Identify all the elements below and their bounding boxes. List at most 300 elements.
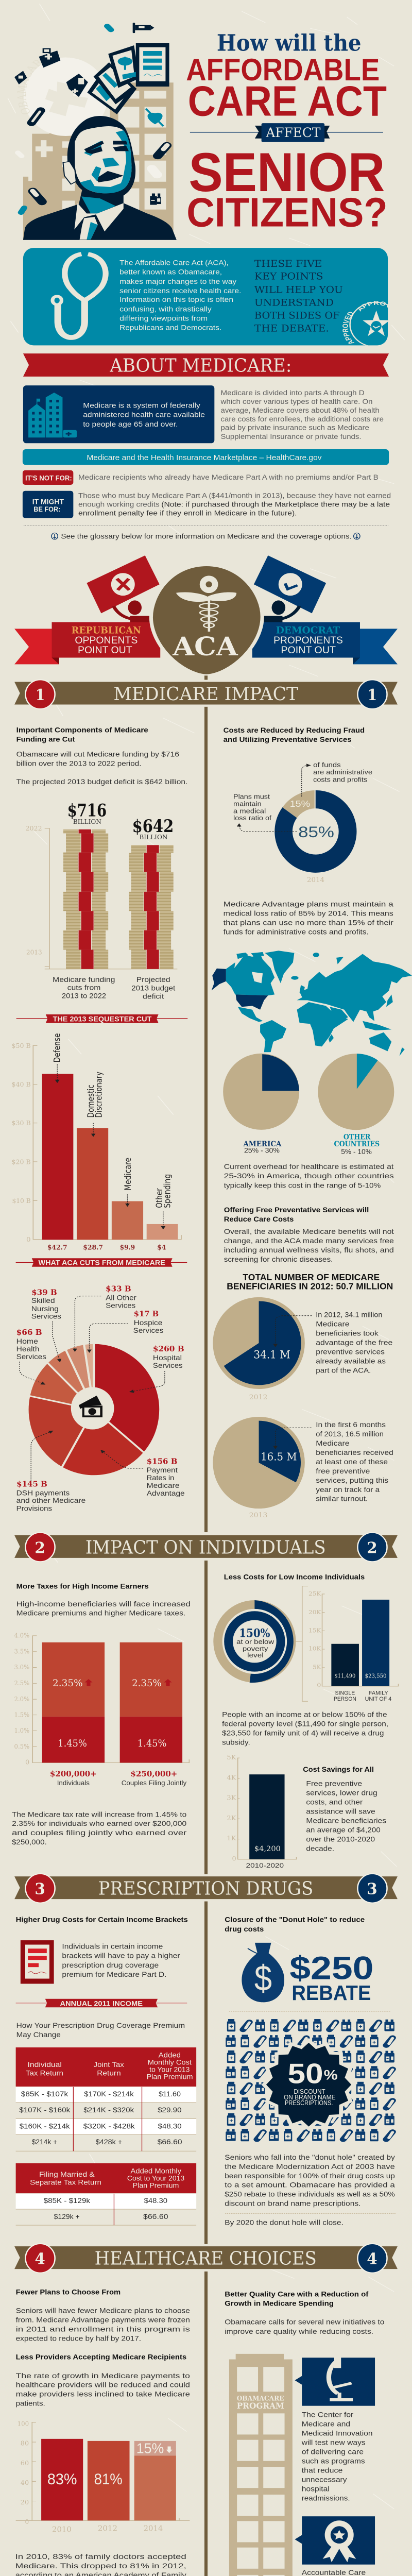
leader arrows <box>20 1296 165 1481</box>
chart: Medicare tax rate bars: 2.5% <box>14 1680 29 1687</box>
text: Medicare parts: which cover various types of health care. On <box>220 398 372 405</box>
badge: ACA caduceus <box>151 565 262 680</box>
text: cost savings for all: Free preventive <box>306 1780 362 1788</box>
key points text: UNDERSTAND <box>254 297 334 308</box>
chart: medical loss ratio donut: 2014 <box>307 875 324 884</box>
chart: poverty level bars: $11,490 <box>334 1673 355 1680</box>
intro text: confusing, with drastically <box>119 305 212 313</box>
text: medical loss ratio <box>224 900 393 936</box>
table: individual and joint returns: $48.30 <box>158 2122 182 2130</box>
chart: medical loss ratio donut: maintain <box>233 801 262 808</box>
panel: Medicare definition: Medicare is a system of federally <box>83 401 200 410</box>
intro text: senior citizens receive health care. <box>119 287 241 295</box>
pie labels: DSH payments <box>16 1489 70 1497</box>
section 2 banner: impact on individuals: 2 <box>367 1538 377 1557</box>
section 1 banner: Medicare impact: MEDICARE IMPACT <box>113 684 299 705</box>
chart: cost savings bar: 4K <box>227 1774 236 1782</box>
chart: doctors accepting Medicare: 40 <box>21 2479 29 2486</box>
section 1 left column: Medicare funding cuts <box>16 726 187 1001</box>
chart: stacked coins <box>25 800 177 1001</box>
chart: cost savings bar: 1K <box>227 1835 236 1842</box>
chart: the 2013 sequester cut: $4 <box>157 1243 166 1251</box>
pie labels: All Other <box>106 1294 136 1302</box>
table: individual and joint returns: $320K - $428k <box>83 2122 135 2130</box>
text: donut hole explanation <box>225 2153 396 2227</box>
chart: the 2013 sequester cut <box>11 1014 187 1251</box>
text: overhead estimate: 25-30% in America, though other countries <box>224 1172 394 1180</box>
table: married filing separately: $129k + <box>54 2213 80 2221</box>
ribbon text: democrat: DEMOCRAT <box>276 624 340 636</box>
text: fewer plans: Fewer Plans to Choose From <box>16 2288 121 2296</box>
chart: poverty level bars: 20K <box>308 1609 321 1616</box>
chart: poverty level bars: 10K <box>308 1646 321 1652</box>
ribbon text: republican <box>72 624 141 656</box>
pie labels: Services <box>153 1362 183 1369</box>
text: Medicare parts: paid by private insurance such as Medicare <box>221 424 369 432</box>
pie labels: Skilled <box>31 1297 55 1304</box>
text: tax rate explanation: 2.35% for individuals who earned over $200,000 <box>12 1820 186 1828</box>
callout: it's not for <box>23 470 379 485</box>
chart: beneficiaries 2013: services, putting this <box>316 1477 388 1484</box>
table: individual and joint returns: $11.60 <box>159 2090 181 2098</box>
chart: beneficiaries 2012: 34.1 M <box>253 1349 290 1361</box>
icon: money <box>79 1396 102 1417</box>
chart: medical loss ratio donut: Plans must <box>233 793 270 801</box>
callout: innovation center: such as programs <box>302 2457 365 2465</box>
chart: beneficiaries 2013: In the first 6 months <box>316 1421 386 1429</box>
key points text: BOTH SIDES OF <box>254 310 340 321</box>
heading and intro: Medicare premiums and higher Medicare taxes. <box>16 1609 185 1617</box>
text: premium subheading <box>16 2022 185 2039</box>
callout: it might be for: BE FOR: <box>33 505 60 513</box>
text: fewer plans: expected to reduce by half by 2017. <box>16 2334 141 2343</box>
chart: Medicare tax rate bars: $250,000+ <box>131 1770 177 1778</box>
table: married filing separately: $66.60 <box>143 2213 168 2221</box>
chart: the 2013 sequester cut: 0 <box>26 1236 31 1243</box>
chart: poverty level rings: 150% <box>239 1627 270 1640</box>
heading: total beneficiaries <box>227 1273 393 1292</box>
badge: 50% discount: PRESCRIPTIONS. <box>285 2099 333 2107</box>
chart: beneficiaries 2013: beneficiaries received <box>316 1449 393 1456</box>
ribbon heading: annual 2011 income: ANNUAL 2011 INCOME <box>60 1999 143 2008</box>
chart: medical loss ratio donut: of funds <box>313 761 341 769</box>
text: cost savings for all: costs, and other <box>306 1798 363 1806</box>
chart: medical loss ratio donut <box>233 761 372 884</box>
heading and intro <box>225 2290 384 2335</box>
text: premium subheading: May Change <box>16 2030 61 2039</box>
ribbon text: republican: OPPONENTS <box>75 635 138 646</box>
chart: beneficiaries 2013: year on track for a <box>316 1486 380 1494</box>
chart: Medicare tax rate bars: 0.5% <box>14 1743 29 1750</box>
pie labels: Home <box>16 1337 38 1345</box>
chart: beneficiaries 2013: at least one of these <box>316 1458 388 1466</box>
text: tax rate explanation: and couples filing jointly who earned over <box>12 1829 187 1837</box>
chart: doctors accepting Medicare: 81% <box>94 2470 123 2487</box>
table: individual and joint returns: $214k + <box>32 2138 57 2146</box>
text: cost savings for all: Cost Savings for All <box>303 1766 374 1773</box>
heading: drug costs <box>225 1925 264 1933</box>
section 3 banner: prescription drugs: 3 <box>367 1880 377 1898</box>
heading <box>225 1916 365 1933</box>
table: individual and joint returns: $428k + <box>96 2138 122 2146</box>
chart: Medicare tax rate bars: 2.0% <box>14 1696 29 1703</box>
icon: money bag with $250 rebate: $250 <box>289 1951 374 1987</box>
badge: 50% discount: % <box>324 2067 338 2083</box>
callout: it might be for: enrollment penalty fee if they enroll in Medicare in the future). <box>78 509 297 517</box>
chart: overhead pies: 5% - 10% <box>341 1148 372 1156</box>
chart: poverty level bars: 0 <box>317 1683 321 1689</box>
chart: beneficiaries 2013: 16.5 M <box>261 1451 297 1463</box>
republican protester with sign <box>87 555 160 622</box>
icons: grid of medicine <box>226 2019 394 2141</box>
chart: doctors accepting Medicare: 2010 <box>52 2526 72 2534</box>
text: family doctors accepted Medicare <box>15 2553 186 2576</box>
chart: beneficiaries 2012: In 2012, 34.1 million <box>316 1311 382 1319</box>
table: individual and joint returns: to Your 2013 <box>149 2065 190 2074</box>
text: donut hole explanation: By 2020 the donut hole will close. <box>225 2218 344 2227</box>
heading: Closure of the "Donut Hole" to reduce <box>225 1916 365 1924</box>
text: tax rate explanation <box>12 1810 187 1846</box>
chart: beneficiaries 2012: already available as <box>316 1357 386 1365</box>
section 2 right column: lower costs <box>213 1573 398 1869</box>
chart: beneficiaries 2013: similar turnout. <box>316 1495 368 1503</box>
icon: money bag with $250 rebate <box>242 1943 374 2005</box>
table: married filing separately: Plan Premium <box>133 2181 179 2190</box>
chart: the 2013 sequester cut: $10 B <box>12 1198 31 1205</box>
stamp: approved <box>342 301 388 345</box>
text: tax rate explanation: The Medicare tax rate will increase from 1.45% to <box>12 1810 186 1819</box>
section 4 banner: healthcare choices <box>14 2244 398 2273</box>
pie labels: $260 B <box>153 1345 184 1353</box>
text: income brackets <box>62 1942 180 1978</box>
chart: medical loss ratio donut: costs and profits <box>313 776 367 784</box>
chart: doctors accepting Medicare: 2012 <box>98 2524 117 2533</box>
section 4 left column: fewer plans and providers <box>13 2288 190 2576</box>
ribbon text: republican: POINT OUT <box>78 645 132 656</box>
section 1 banner: Medicare impact: 1 <box>36 686 45 704</box>
section 3 right column: donut hole <box>225 1916 396 2227</box>
text: fewer plans: Seniors will have fewer Medicare plans to choose <box>16 2307 190 2315</box>
icon: stethoscope <box>53 254 106 337</box>
chart: poverty level rings: at or below <box>236 1638 274 1646</box>
table: individual and joint returns: Return <box>97 2069 121 2077</box>
pie labels: Hospice <box>134 1319 162 1327</box>
chart: stacked coins: Projected <box>136 976 170 984</box>
text: income brackets: brackets will have to pay a higher <box>62 1952 180 1960</box>
text: cost savings for all: an average of $4,200 <box>306 1826 381 1834</box>
chart: cost savings bar: $4,200 <box>254 1844 281 1853</box>
callout: it might be for: enough working credits <box>78 501 160 509</box>
callout: innovation center: Medicare and <box>302 2420 350 2428</box>
heading: costs are reduced: Costs are Reduced by Reducing Fraud <box>224 726 365 734</box>
chart: Medicare tax rate bars: 2.35% <box>53 1677 83 1689</box>
heading and text <box>16 726 187 786</box>
chart: stacked coins: 2013 <box>26 950 42 956</box>
callout: innovation center <box>295 2357 375 2502</box>
table: individual and joint returns: Tax Return <box>26 2069 63 2077</box>
text: provider payment growth: patients. <box>16 2399 45 2408</box>
heading banner: about Medicare <box>23 353 389 377</box>
heading and text: Important Components of Medicare <box>16 726 148 734</box>
text: fewer plans: Less Providers Accepting Medicare Recipients <box>16 2353 186 2361</box>
key points text: WILL HELP YOU <box>254 284 343 295</box>
table: married filing separately: $48.30 <box>144 2197 167 2205</box>
section 3 banner: prescription drugs: PRESCRIPTION DRUGS <box>98 1878 313 1900</box>
seal: Obamacare circle <box>18 58 106 136</box>
icon: money bag with $250 rebate: REBATE <box>291 1981 371 2005</box>
bar: marketplace heading <box>23 449 389 465</box>
section 1 banner: Medicare impact: 1 <box>368 686 377 704</box>
heading and intro: High-income beneficiaries will face increased <box>16 1600 191 1608</box>
chart: Medicare tax rate bars: 1.45% <box>58 1738 87 1749</box>
section 1 right column: fraud reduction and preventative services <box>212 726 412 1519</box>
chart: beneficiaries 2013 <box>213 1417 393 1519</box>
section 4 banner: healthcare choices: HEALTHCARE CHOICES <box>95 2248 317 2269</box>
chart: the 2013 sequester cut: $50 B <box>11 1043 31 1049</box>
chart: Medicare tax rate bars: $200,000+ <box>50 1770 97 1778</box>
pie labels: Medicare <box>147 1481 179 1489</box>
chart: the 2013 sequester cut: Domestic <box>86 1084 96 1117</box>
table: individual and joint returns: Monthly Cost <box>148 2058 192 2066</box>
intro text: better known as Obamacare, <box>119 268 222 276</box>
chart: beneficiaries 2012: part of the ACA. <box>316 1366 371 1375</box>
ribbon text: democrat: PROPONENTS <box>273 635 343 646</box>
section 4 banner: healthcare choices: 4 <box>367 2250 377 2268</box>
pie labels: Health <box>16 1345 40 1353</box>
table: married filing separately: $85K - $129k <box>44 2197 91 2205</box>
chart: beneficiaries 2012 <box>213 1297 392 1401</box>
chart: poverty level bars: SINGLE <box>335 1690 355 1696</box>
table: individual and joint returns: $85K - $107k <box>21 2090 68 2098</box>
chart: the 2013 sequester cut: Discretionary <box>94 1072 104 1117</box>
badge: 50% discount: 50 <box>288 2058 323 2090</box>
section 3 banner: prescription drugs <box>14 1874 398 1903</box>
heading and text: Funding are Cut <box>16 735 75 743</box>
pie labels: Services <box>133 1327 163 1334</box>
chart: overhead pies: AMERICA <box>243 1140 282 1148</box>
text: fewer plans: in 2011 and enrollment in this program is <box>16 2325 190 2333</box>
chart: poverty level rings <box>213 1586 308 1701</box>
intro text: The Affordable Care Act (ACA), <box>119 259 229 267</box>
table: individual and joint returns: $107K - $160k <box>19 2106 71 2114</box>
table: individual and joint returns <box>16 2047 196 2151</box>
pie labels: $33 B <box>106 1284 131 1294</box>
text: income brackets: prescription drug coverage <box>62 1961 159 1969</box>
bar: marketplace heading: Medicare and the Health Insurance Marketplace – HealthCare.gov <box>87 453 322 462</box>
text: income brackets: Individuals in certain income <box>62 1942 163 1951</box>
chart: poverty level bars: 5K <box>313 1664 321 1671</box>
section: about Medicare <box>14 353 398 680</box>
text: free preventative services: Offering Free Preventative Services will <box>224 1206 369 1214</box>
chart: poverty level bars: UNIT OF 4 <box>365 1696 391 1702</box>
hospital building backdrop <box>23 82 174 240</box>
chart: the 2013 sequester cut: $40 B <box>11 1081 31 1088</box>
chart: beneficiaries 2012: beneficiaries took <box>316 1329 379 1337</box>
chart: cost savings bar <box>227 1754 297 1869</box>
chart: doctors accepting Medicare: 15% <box>136 2441 164 2456</box>
heading and intro <box>16 1582 191 1617</box>
chart: beneficiaries 2013: Medicare <box>316 1439 350 1447</box>
text: premium subheading: How Your Prescription Drug Coverage Premium <box>16 2022 185 2029</box>
pie labels <box>16 1284 185 1513</box>
pie labels: $66 B <box>16 1328 42 1337</box>
key points text: THE DEBATE. <box>254 323 329 334</box>
callout: innovation center: that reduce <box>302 2466 342 2475</box>
chart: doctors accepting Medicare: 83% <box>47 2470 77 2487</box>
chart: beneficiaries 2012: advantage of the free <box>316 1338 392 1347</box>
chart: medical loss ratio donut: a medical <box>233 808 266 815</box>
table: married filing separately: Cost to Your 2013 <box>127 2174 184 2182</box>
chart: cost savings bar: 5K <box>227 1754 236 1761</box>
intro text: Republicans and Democrats. <box>119 324 221 332</box>
pie labels: $39 B <box>31 1288 57 1297</box>
heading: costs are reduced: and Utilizing Preventative Services <box>224 736 352 743</box>
heading and intro: improve care quality while reducing costs. <box>225 2328 373 2335</box>
panel: Medicare definition: to people age 65 and over. <box>83 420 178 428</box>
section 3 banner: prescription drugs: 3 <box>35 1880 45 1898</box>
table: individual and joint returns: $214K - $320k <box>83 2106 134 2114</box>
chart: stacked coins: 2013 to 2022 <box>62 992 106 1000</box>
chart: the 2013 sequester cut: Defense <box>52 1033 62 1062</box>
intro text: Information on this topic is often <box>119 296 233 303</box>
text: cost savings for all: assistance will save <box>306 1807 375 1816</box>
text: Medicare parts: Medicare is divided into parts A through D <box>221 389 365 397</box>
callout: innovation center: will test new ways <box>301 2438 366 2447</box>
panel: introduction <box>23 248 388 345</box>
chart: doctors accepting Medicare: 0 <box>25 2518 29 2526</box>
stamp: approved: APPROVED <box>342 312 354 344</box>
chart: Medicare tax rate bars: 1.45% <box>138 1738 166 1749</box>
chart: the 2013 sequester cut: Spending <box>163 1174 173 1208</box>
badge: 50% discount <box>266 2043 351 2127</box>
chart: the 2013 sequester cut: $30 B <box>11 1120 31 1127</box>
intro text: differing viewpoints from <box>119 314 208 323</box>
heading banner: about Medicare: ABOUT MEDICARE: <box>109 355 291 377</box>
key points text: THESE FIVE <box>254 258 322 269</box>
text: fewer plans: from. Medicare Advantage payments were frozen <box>16 2316 190 2324</box>
section 4 banner: healthcare choices: 4 <box>35 2250 45 2268</box>
table: individual and joint returns: $170K - $214k <box>84 2090 134 2098</box>
icon: money bag with $250 rebate: $ <box>254 1958 272 1998</box>
pie labels: and other Medicare <box>16 1497 85 1504</box>
text: Medicare parts: Supplemental Insurance or private funds. <box>221 433 362 440</box>
chart: poverty level bars: $23,550 <box>365 1673 387 1680</box>
chart: poverty level rings: poverty <box>243 1646 268 1653</box>
text: provider payment growth <box>16 2371 190 2408</box>
chart: stacked coins: Medicare funding <box>53 975 115 984</box>
table: married filing separately: Added Monthly <box>131 2167 182 2175</box>
chart: stacked coins: deficit <box>143 992 164 1001</box>
callout: it's not for: IT'S NOT FOR: <box>25 474 72 482</box>
chart: poverty level bars: 25K <box>308 1591 321 1597</box>
intro text: makes major changes to the way <box>119 277 237 285</box>
chart: beneficiaries 2013: 2013 <box>249 1511 267 1519</box>
section 2 banner: impact on individuals: 2 <box>35 1538 45 1557</box>
ribbon heading: THE 2013 SEQUESTER CUT <box>53 1015 152 1023</box>
chart: poverty level bars: PERSON <box>334 1696 356 1702</box>
pie labels: Rates in <box>147 1474 174 1482</box>
callout: innovation center: unnecessary <box>302 2476 347 2484</box>
heading and intro: Better Quality Care with a Reduction of <box>225 2290 369 2298</box>
pie labels: Provisions <box>16 1504 52 1513</box>
chart: cost savings bar: 0 <box>232 1855 236 1862</box>
chart: poverty level bars <box>308 1591 398 1702</box>
callout: innovation center: of delivering care <box>302 2448 364 2456</box>
chart: the 2013 sequester cut: Medicare <box>123 1158 133 1191</box>
table: individual and joint returns: $160K - $214k <box>20 2122 70 2130</box>
text: family doctors accepted Medicare: In 2010, 83% of family doctors accepted <box>15 2553 186 2561</box>
panel: Medicare definition <box>23 385 214 443</box>
chart: doctors accepting Medicare <box>16 2420 190 2534</box>
ribbon text: democrat <box>273 624 343 656</box>
ribbon heading: annual 2011 income <box>16 1999 187 2008</box>
text: drug subsidy: subsidy. <box>222 1738 250 1747</box>
emblem: ACA debate header <box>14 555 398 680</box>
chart: doctors accepting Medicare: 20 <box>21 2499 29 2506</box>
chart: doctors accepting Medicare: 80 <box>21 2439 29 2447</box>
chart: poverty level bars: 15K <box>308 1628 321 1634</box>
text: fewer plans <box>16 2288 190 2361</box>
table: individual and joint returns: $66.60 <box>158 2138 182 2146</box>
chart: doctors accepting Medicare: 100 <box>18 2420 29 2428</box>
chart: beneficiaries 2012: 2012 <box>249 1393 267 1401</box>
section 4 right column: better quality care <box>214 2290 384 2576</box>
chart: Medicare tax rate bars: Individuals <box>57 1780 90 1787</box>
chart: the 2013 sequester cut: $9.9 <box>120 1243 135 1251</box>
ribbon text: democrat: POINT OUT <box>281 645 336 656</box>
table: individual and joint returns: $29.90 <box>158 2106 182 2114</box>
text: free preventative services <box>224 1206 394 1263</box>
chart: stacked coins: $642 <box>132 816 174 836</box>
chart: Medicare tax rate bars: 1.0% <box>14 1727 29 1734</box>
chart: doctors accepting Medicare: 60 <box>21 2459 29 2467</box>
chart: Medicare tax rate bars <box>14 1633 189 1787</box>
stamp: approved: APPROVED <box>357 301 388 312</box>
ribbon: affect <box>190 123 383 142</box>
icon: hospital and ambulance <box>28 393 77 437</box>
chart: Medicare tax rate bars: 1.5% <box>14 1711 29 1719</box>
chart: stacked coins: cuts from <box>67 984 100 992</box>
floating medical icons <box>14 23 167 213</box>
table: married filing separately: Separate Tax Return <box>30 2178 101 2187</box>
chart: medical loss ratio donut: loss ratio of <box>233 815 272 822</box>
chart: the 2013 sequester cut: Other <box>154 1188 164 1208</box>
callout: it might be for <box>23 491 391 518</box>
chart: stacked coins: 2013 budget <box>131 984 176 992</box>
badge: 50% discount: ON BRAND NAME <box>284 2094 336 2101</box>
chart: what ACA cuts from Medicare <box>16 1258 187 1513</box>
table: individual and joint returns: Joint Tax <box>94 2061 124 2069</box>
panel: Medicare definition: administered health care available <box>83 411 205 419</box>
table: individual and joint returns: Added <box>159 2051 181 2059</box>
table: individual and joint returns: Individual <box>28 2061 62 2069</box>
chart: stacked coins: 2022 <box>25 825 42 832</box>
heading: Less Costs for Low Income Individuals <box>224 1573 365 1581</box>
text: cost savings for all: decade. <box>306 1844 334 1853</box>
section 2 left column: more taxes <box>12 1582 191 1846</box>
democrat protester with sign <box>254 555 326 622</box>
chart: cost savings bar: 2010-2020 <box>246 1862 284 1869</box>
chart: beneficiaries 2013: of 2013, 16.5 million <box>316 1430 384 1438</box>
chart: Medicare tax rate bars: 3.5% <box>14 1649 29 1655</box>
callout: it might be for: IT MIGHT <box>32 498 64 506</box>
chart: overhead pies <box>223 1054 394 1156</box>
callout: innovation center: The Center for <box>302 2411 354 2419</box>
title <box>186 29 388 235</box>
text: free preventative services: screening for chronic diseases. <box>224 1256 333 1263</box>
chart: beneficiaries 2012: preventive services <box>316 1348 385 1356</box>
chart: Medicare tax rate bars: 4.0% <box>14 1633 29 1639</box>
